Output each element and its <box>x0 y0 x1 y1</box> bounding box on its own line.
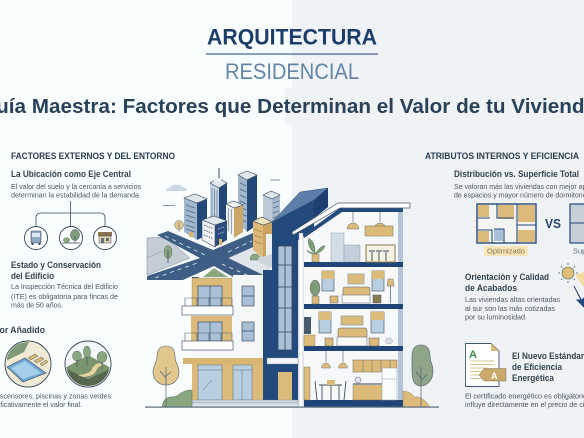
tower: spire <box>210 168 227 225</box>
icon: bus <box>24 226 48 250</box>
icon: park <box>60 226 82 250</box>
icon: garden <box>65 341 111 388</box>
bedroom floor upper <box>310 271 394 304</box>
tower: small white <box>202 216 227 247</box>
bush: tan <box>403 391 430 407</box>
logo word: residencial: RESIDENCIAL <box>225 59 359 84</box>
subsection: layout <box>454 169 584 200</box>
kitchen floor <box>304 351 397 400</box>
subsection: building condition: del Edificio <box>11 271 54 281</box>
icon: shop <box>94 226 116 250</box>
icon: sun <box>558 263 584 287</box>
subsection: location: determinan la estabilidad de la demanda. <box>11 190 141 200</box>
subsection: energy standard <box>465 351 584 409</box>
left wing <box>182 266 263 400</box>
cloud <box>166 185 187 191</box>
icon: energy certificate <box>466 344 506 386</box>
bush: left <box>162 390 192 407</box>
tower: grey back <box>263 191 280 227</box>
tower: left <box>184 194 207 240</box>
tree: green small <box>164 246 172 263</box>
steps <box>176 400 298 407</box>
city blocks and roads <box>147 231 275 280</box>
balconies <box>182 298 233 350</box>
icon: energy certificate: A <box>491 371 498 381</box>
subsection: location: El valor del suelo y la cercanía a servicios <box>11 182 141 191</box>
icon: energy certificate: A <box>469 349 477 361</box>
logo word: arquitectura: ARQUITECTURA <box>207 24 377 50</box>
tower: tan <box>253 217 272 260</box>
heading: internal attributes: ATRIBUTOS INTERNOS Y EFICIENCIA <box>425 151 579 161</box>
subsection: orientation <box>465 272 560 322</box>
tree: tan <box>153 346 179 407</box>
arrow: sunlight <box>574 286 584 307</box>
tree: tan small <box>174 220 184 232</box>
subsection: energy standard: Energética <box>512 373 555 383</box>
living room floor <box>307 212 395 262</box>
bush and wall <box>250 254 272 268</box>
subsection: building condition <box>11 260 118 310</box>
subsection: location <box>11 169 141 200</box>
tower: cream <box>226 201 243 238</box>
illustration: city <box>147 168 280 280</box>
panel: external factors <box>0 151 175 409</box>
subsection: orientation: por su luminosidad. <box>465 312 527 322</box>
tower core <box>263 188 328 407</box>
subsection: orientation: Orientación y Calidad <box>465 272 549 282</box>
roof <box>292 203 410 235</box>
subsection: orientation: Las viviendas altas orientadas <box>465 295 560 304</box>
label: optimised: Optimizado <box>487 246 525 256</box>
vs: VS <box>545 216 561 231</box>
subsection: orientation: de Acabados <box>465 283 517 293</box>
icon: pool <box>5 340 51 387</box>
floor slabs <box>304 262 403 407</box>
logo <box>206 24 378 84</box>
subsection: building condition: más de 50 años. <box>11 300 63 310</box>
windows <box>198 286 254 341</box>
section interior <box>292 203 410 407</box>
floor plan: large <box>570 204 584 243</box>
subsection: building condition: Estado y Conservación <box>11 260 101 270</box>
subsection: energy standard: de Eficiencia <box>512 362 563 372</box>
heading: external factors: FACTORES EXTERNOS Y DEL ENTORNO <box>11 151 175 161</box>
subsection: location: La Ubicación como Eje Central <box>11 169 131 179</box>
ground floor <box>183 358 263 364</box>
subsection: orientation: al sur son las más cotizadas <box>465 304 555 313</box>
bedroom floor lower <box>304 312 392 346</box>
subsection: building condition: (ITE) es obligatoria para fincas de <box>11 292 118 301</box>
ground line <box>145 406 439 408</box>
illustration: residential building <box>145 188 439 408</box>
subsection: building condition: La Inspección Técnica del Edificio <box>11 282 118 291</box>
panel: internal attributes <box>425 151 584 409</box>
subsection: added value <box>0 325 111 409</box>
tower: right <box>238 171 257 232</box>
tree: green <box>412 345 433 407</box>
floor plan: optimised <box>477 204 536 243</box>
connector lines <box>36 201 105 226</box>
